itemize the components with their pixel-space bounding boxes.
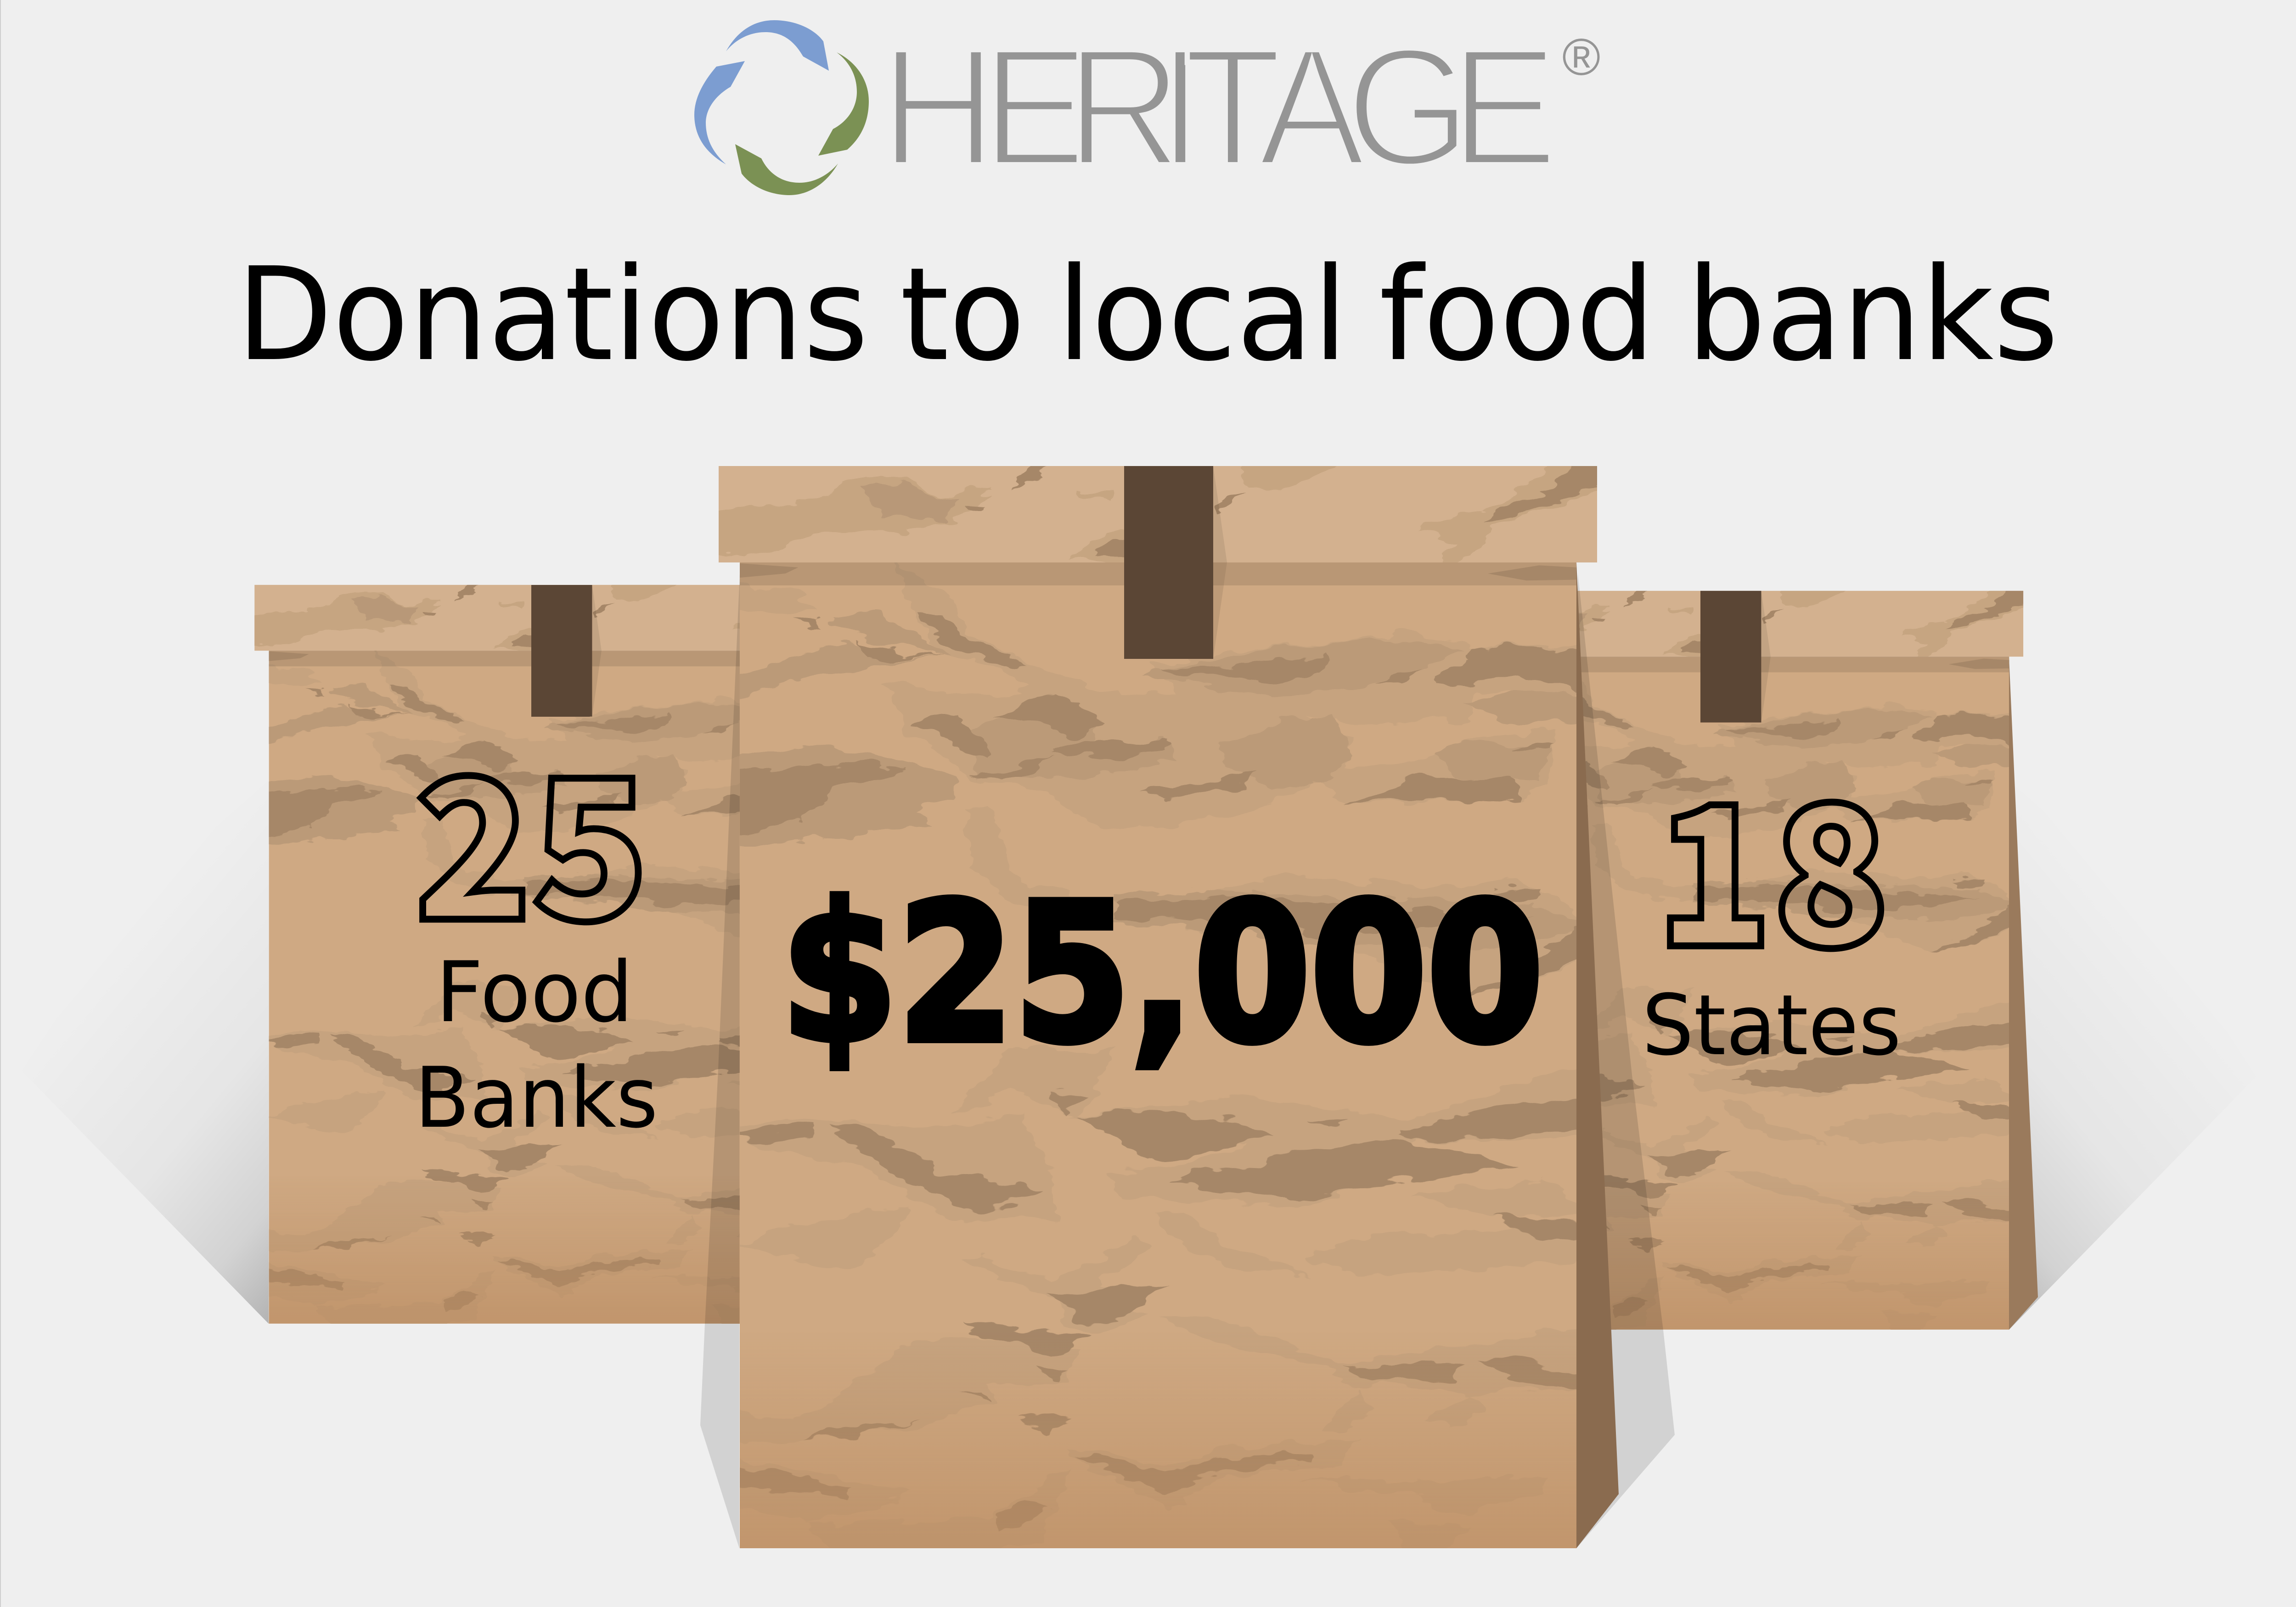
registered mark: ® xyxy=(1562,28,1600,86)
stat: 18: 18 xyxy=(1655,720,1890,1002)
right bag xyxy=(1417,587,2038,1334)
stat: $25,000: $25,000 xyxy=(781,863,1543,1084)
label: Banks: Banks xyxy=(415,1049,658,1146)
center bag cast shadow xyxy=(700,574,1675,1548)
logo wordmark: HERITAGE xyxy=(880,13,1558,201)
right bag side gusset xyxy=(2009,658,2038,1330)
left floor shadow xyxy=(22,781,269,1324)
icon: recycling swirl xyxy=(694,20,869,195)
title: Donations to local food banks xyxy=(236,240,2059,390)
label: Food: Food xyxy=(436,944,633,1041)
center bag side gusset xyxy=(1576,562,1619,1548)
right floor shadow xyxy=(2009,781,2256,1330)
stat: 25: 25 xyxy=(415,694,649,975)
logo: Heritage xyxy=(694,13,1600,201)
label: States: States xyxy=(1642,977,1901,1074)
left bag xyxy=(248,581,863,1328)
center bag xyxy=(708,461,1619,1555)
